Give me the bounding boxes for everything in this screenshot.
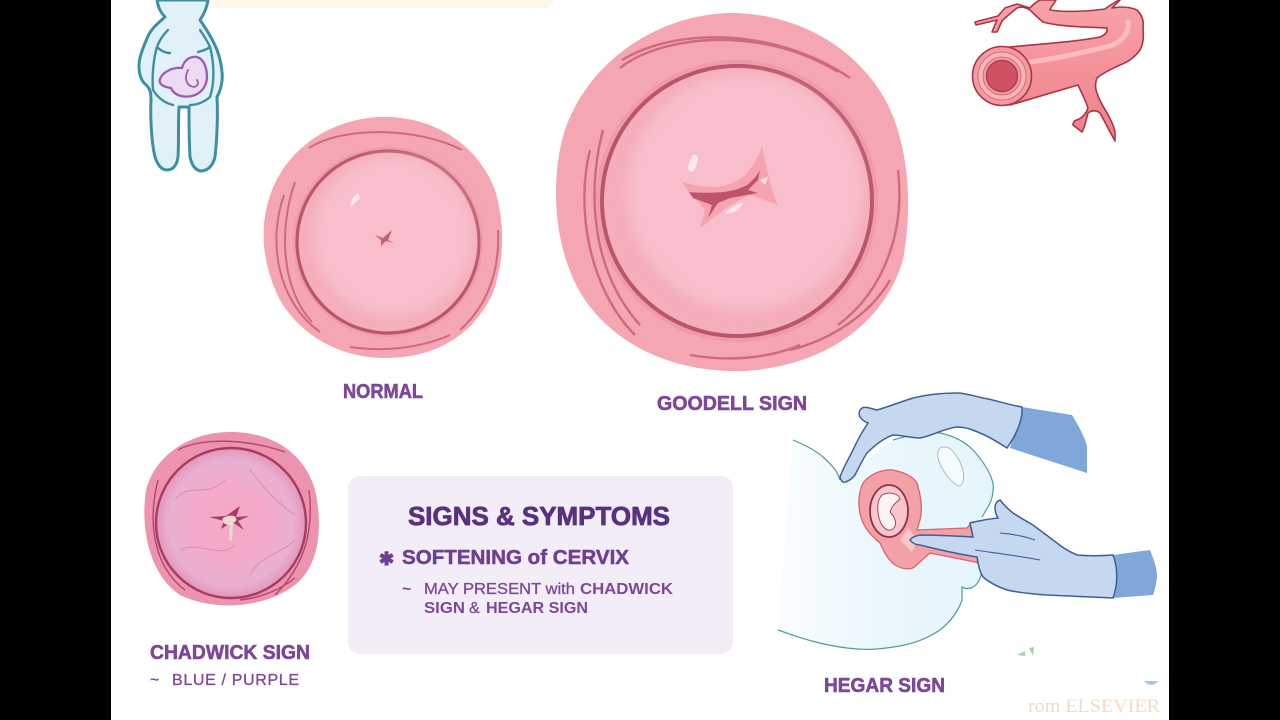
sub-bullet line two: & <box>469 600 480 617</box>
sub-bullet line two: SIGN <box>424 600 465 617</box>
gloved upper hand <box>840 393 1087 482</box>
sub-bullet line two <box>424 600 588 617</box>
sub-bullet line one: CHADWICK <box>580 581 673 598</box>
icon: artery <box>972 0 1143 141</box>
illustration: Goodell sign cervix <box>556 13 908 371</box>
watermark: Elsevier: rom ELSEVIER <box>1028 696 1160 717</box>
label: Goodell sign: GOODELL SIGN <box>657 393 807 415</box>
label: blue / purple: BLUE / PURPLE <box>172 672 299 689</box>
bullet: softening of cervix: ✱ <box>379 549 394 569</box>
watermark: Elsevier <box>1017 647 1160 717</box>
sub-bullet line one: ~ <box>402 581 411 598</box>
label: Chadwick sign: CHADWICK SIGN <box>150 642 310 664</box>
maternal abdomen <box>778 433 993 649</box>
illustration: Hegar sign bimanual exam <box>778 393 1157 649</box>
top caption box remnant <box>212 0 554 8</box>
cervical os <box>682 147 778 228</box>
icon: fetus in belly <box>160 57 207 97</box>
panel heading: SIGNS & SYMPTOMS <box>408 501 670 531</box>
sub-bullet line one <box>402 581 673 598</box>
label: normal: NORMAL <box>343 381 423 403</box>
artery lumen <box>972 46 1032 106</box>
bullet: softening of cervix: SOFTENING of CERVIX <box>402 547 630 569</box>
sub-bullet line two: HEGAR SIGN <box>486 600 588 617</box>
illustration: Chadwick sign cervix <box>144 432 319 605</box>
label: Hegar sign: HEGAR SIGN <box>824 675 945 697</box>
sub-bullet line one: MAY PRESENT with <box>424 581 575 598</box>
uterus with fetus <box>859 470 980 569</box>
panel: signs and symptoms <box>348 476 733 654</box>
illustration: normal cervix <box>264 117 502 358</box>
icon: pregnant figure <box>139 0 222 171</box>
gloved lower hand <box>910 500 1157 598</box>
label: blue / purple: ~ <box>150 672 159 689</box>
